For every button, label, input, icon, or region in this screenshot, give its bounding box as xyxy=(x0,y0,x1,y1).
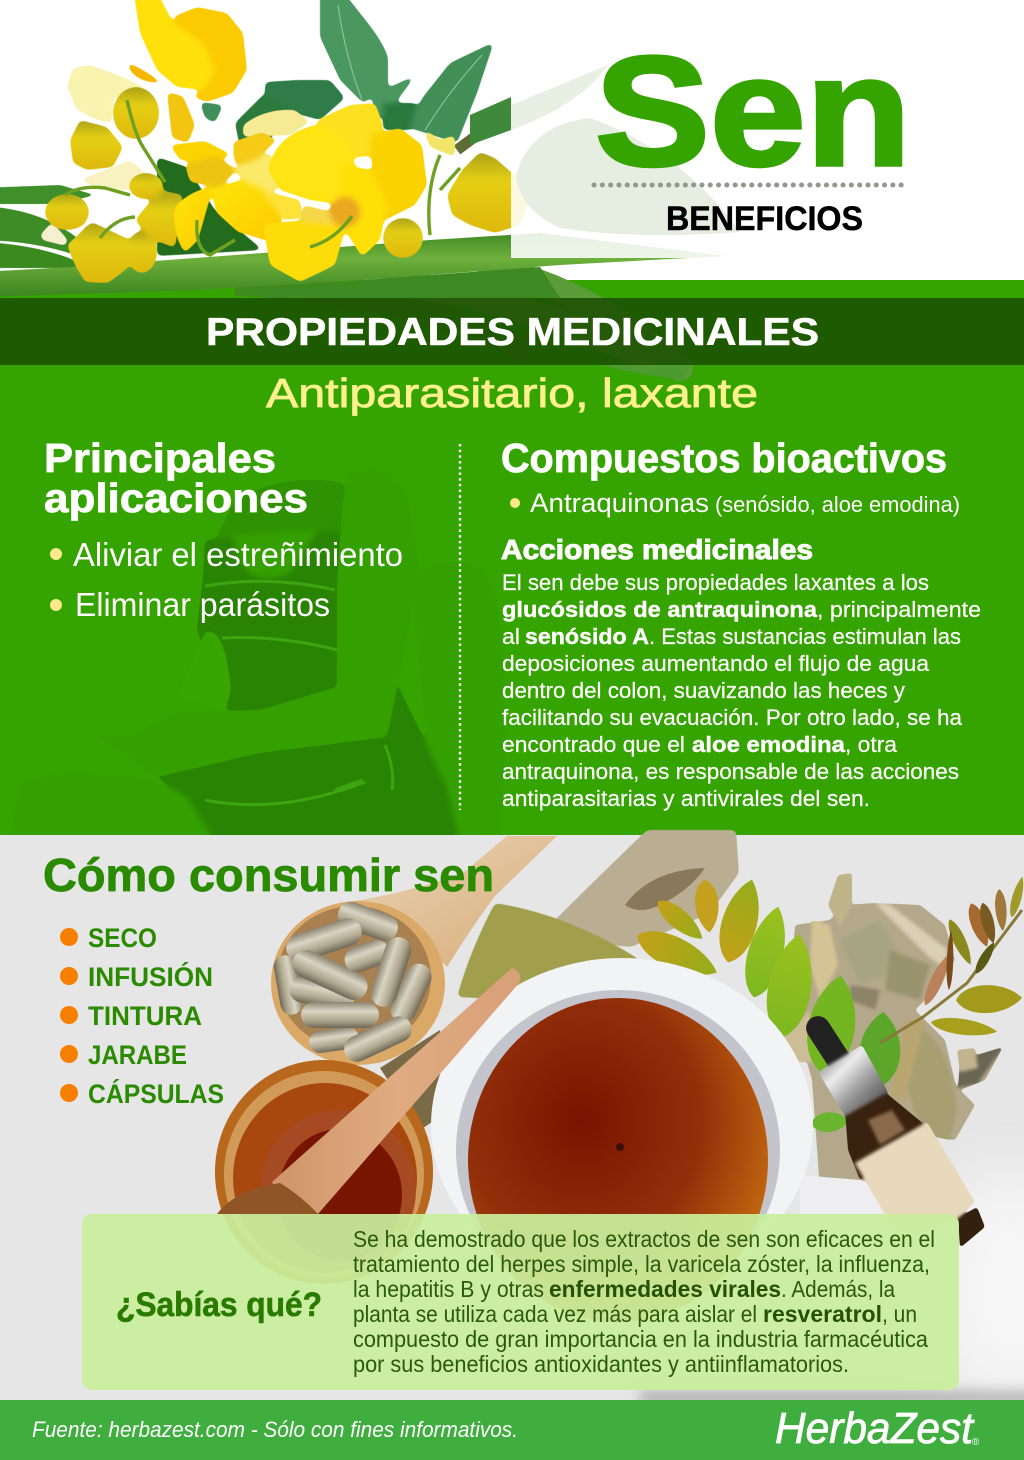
bullet: anthraquinones: (senósido, aloe emodina) xyxy=(715,492,960,517)
paper label xyxy=(855,1122,975,1240)
hero image: senna flowers, leaves and pods xyxy=(0,0,725,368)
translucent white panel xyxy=(511,0,1024,258)
icon: left pods xyxy=(0,185,95,268)
footer source text: Fuente: herbazest.com - Sólo con fines informativos. xyxy=(32,1417,518,1442)
icon: cup saucer handle xyxy=(800,1175,932,1225)
icon: small yellow buds xyxy=(45,87,423,283)
callout text: compuesto de gran importancia en la industria farmacéutica xyxy=(353,1326,928,1352)
bullet: anthraquinones: Antraquinonas xyxy=(530,488,709,518)
bottle base xyxy=(958,1207,985,1248)
icon: left side petals xyxy=(170,132,303,253)
light glow lower right xyxy=(930,1170,1024,1410)
icon: right branch xyxy=(880,876,1024,1043)
icon: pod below main xyxy=(263,267,560,298)
item: dried xyxy=(60,923,157,953)
bottle body xyxy=(845,1092,930,1180)
callout text: tratamiento del herpes simple, la varicela zóster, la influenza, xyxy=(353,1251,930,1277)
dropper bulb xyxy=(818,1028,840,1062)
bullet: remove parasites: Eliminar parásitos xyxy=(75,586,330,623)
callout: did you know xyxy=(82,1214,959,1390)
callout heading: ¿Sabías qué? xyxy=(116,1286,322,1324)
item: syrup: JARABE xyxy=(88,1040,187,1070)
callout text xyxy=(353,1226,935,1377)
icon: tea xyxy=(468,998,768,1322)
icon: green leaves xyxy=(200,0,494,148)
product photo collage xyxy=(215,830,1024,1322)
icon: flower stems xyxy=(65,100,460,255)
large lower leaf xyxy=(907,1025,957,1140)
text block: medicinal actions: al xyxy=(502,624,520,649)
olive shreds xyxy=(840,920,905,985)
icon: dropper bottle xyxy=(818,1028,985,1248)
divider between columns xyxy=(459,444,461,810)
right column: bioactive compounds xyxy=(501,435,981,811)
icon: green dry leaf xyxy=(457,903,640,1000)
capsules xyxy=(272,898,436,1066)
leaf midribs xyxy=(338,5,482,130)
bullet: relieve constipation: Aliviar el estreñimiento xyxy=(73,536,403,573)
icon: dried leaf pile xyxy=(780,873,1003,1215)
callout text: . Además, la xyxy=(781,1276,895,1302)
spoon bowl xyxy=(271,901,445,1065)
toilet roll xyxy=(177,631,231,712)
torso and shorts xyxy=(157,530,462,850)
icon: dark foliage under flowers xyxy=(157,157,263,256)
callout text: resveratrol xyxy=(763,1301,882,1327)
panel: medicinal properties background xyxy=(0,280,1024,835)
icon: back pod xyxy=(470,97,511,145)
top dry leaf xyxy=(828,873,852,927)
item: capsules: CÁPSULAS xyxy=(88,1078,224,1109)
subheading: medicinal actions: Acciones medicinales xyxy=(501,534,813,565)
bottle highlight xyxy=(868,1110,905,1145)
item: infusion: INFUSIÓN xyxy=(88,961,213,992)
legs xyxy=(10,773,220,850)
text block: medicinal actions: dentro del colon, suavizando las heces y xyxy=(502,678,906,703)
icon: dark stem behind flower xyxy=(457,113,507,150)
title: Sen xyxy=(595,25,911,199)
callout text: enfermedades virales xyxy=(549,1276,781,1302)
dotted divider xyxy=(594,182,906,188)
icon: wooden spoon with capsules xyxy=(271,836,557,1066)
arm and roll xyxy=(93,468,420,777)
tea specks xyxy=(616,1143,624,1151)
text block: medicinal actions: glucósidos de antraquinona xyxy=(502,597,818,622)
panel: how to consume background xyxy=(0,835,1024,1400)
heading band xyxy=(0,298,1024,365)
icon: large dried leaf xyxy=(552,830,739,947)
text block: medicinal actions: , otra xyxy=(845,732,897,757)
icon: pale upper leaf xyxy=(511,65,608,130)
text block: medicinal actions: antiparasitarias y antivirales del sen. xyxy=(502,786,870,811)
text block: medicinal actions: , principalmente xyxy=(817,597,981,622)
footer band xyxy=(0,1400,1024,1460)
text block: medicinal actions: deposiciones aumentando el flujo de agua xyxy=(502,651,929,676)
lower body xyxy=(10,480,505,850)
dark leaf mark xyxy=(625,868,705,910)
icon: right yellow bud xyxy=(447,152,532,233)
text block: medicinal actions: aloe emodina xyxy=(692,732,846,757)
collar xyxy=(818,1045,888,1116)
background silhouette: person holding toilet roll xyxy=(10,468,505,850)
list: forms of use xyxy=(60,923,224,1109)
spoon handle xyxy=(331,836,557,967)
shadow under photo xyxy=(640,1390,1024,1406)
item: tincture: TINTURA xyxy=(88,1001,202,1031)
cup inner shadow xyxy=(456,990,780,1310)
callout background xyxy=(82,1214,959,1390)
text block: medicinal actions: . Estas sustancias estimulan las xyxy=(649,624,961,649)
icon: pale leaf xyxy=(516,118,740,235)
icon: upper yellow flower xyxy=(127,0,247,143)
left column: main applications xyxy=(44,435,403,623)
logo: HerbaZest: HerbaZest xyxy=(775,1404,975,1453)
text block: medicinal actions: encontrado que el xyxy=(502,732,685,757)
text block: medicinal actions: facilitando su evacuación. Por otro lado, se ha xyxy=(502,705,962,730)
subtitle: BENEFICIOS xyxy=(666,200,863,238)
icon: dry ground between spoon and cup xyxy=(380,1030,450,1130)
icon: honey bowl xyxy=(215,1060,433,1284)
callout text: Se ha demostrado que los extractos de sen son eficaces en el xyxy=(353,1226,935,1252)
icon: pale back petals xyxy=(40,65,455,246)
dark shard xyxy=(958,1047,1003,1088)
heading: medicinal properties: PROPIEDADES MEDICINALES xyxy=(206,311,819,354)
bullet: anthraquinones xyxy=(510,488,960,518)
heading: bioactive compounds: Compuestos bioactivos xyxy=(501,435,947,481)
callout text: por sus beneficios antioxidantes y antiinflamatorios. xyxy=(353,1351,849,1377)
pale strip leaf xyxy=(875,903,948,968)
icon: wooden stirrer xyxy=(217,968,520,1214)
beige left leaves xyxy=(810,920,838,1000)
heading: how to consume: Cómo consumir sen xyxy=(43,849,494,901)
right thigh xyxy=(413,561,505,850)
neck xyxy=(232,530,318,578)
callout text: la hepatitis B y otras xyxy=(353,1276,544,1302)
callout text: , un xyxy=(882,1301,917,1327)
icon: lower pods xyxy=(235,268,680,368)
ghost leaf behind title xyxy=(511,65,740,235)
callout text: planta se utiliza cada vez más para aislar el xyxy=(353,1301,757,1327)
hair xyxy=(215,480,345,540)
icon: main pod xyxy=(0,233,725,297)
heading: principal uses: aplicaciones xyxy=(44,475,308,521)
text block: medicinal actions: El sen debe sus propiedades laxantes a los xyxy=(502,570,929,595)
pod tip over band xyxy=(600,365,690,380)
arm xyxy=(93,468,420,777)
subheading: properties: Antiparasitario, laxante xyxy=(266,370,758,416)
logo: HerbaZest: ® xyxy=(972,1437,980,1448)
heading: principal uses xyxy=(44,435,308,521)
text block: medicinal actions: antraquinona, es responsable de las acciones xyxy=(502,759,959,784)
icon: large yellow flower xyxy=(263,103,427,282)
icon: white tea cup xyxy=(431,958,813,1292)
heading: principal uses: Principales xyxy=(44,435,276,481)
text block: medicinal actions xyxy=(502,570,981,811)
text block: medicinal actions: senósido A xyxy=(525,624,649,649)
top stripes xyxy=(205,581,393,805)
icon: green leaves on branch xyxy=(631,875,904,1133)
item: dried: SECO xyxy=(88,923,157,953)
